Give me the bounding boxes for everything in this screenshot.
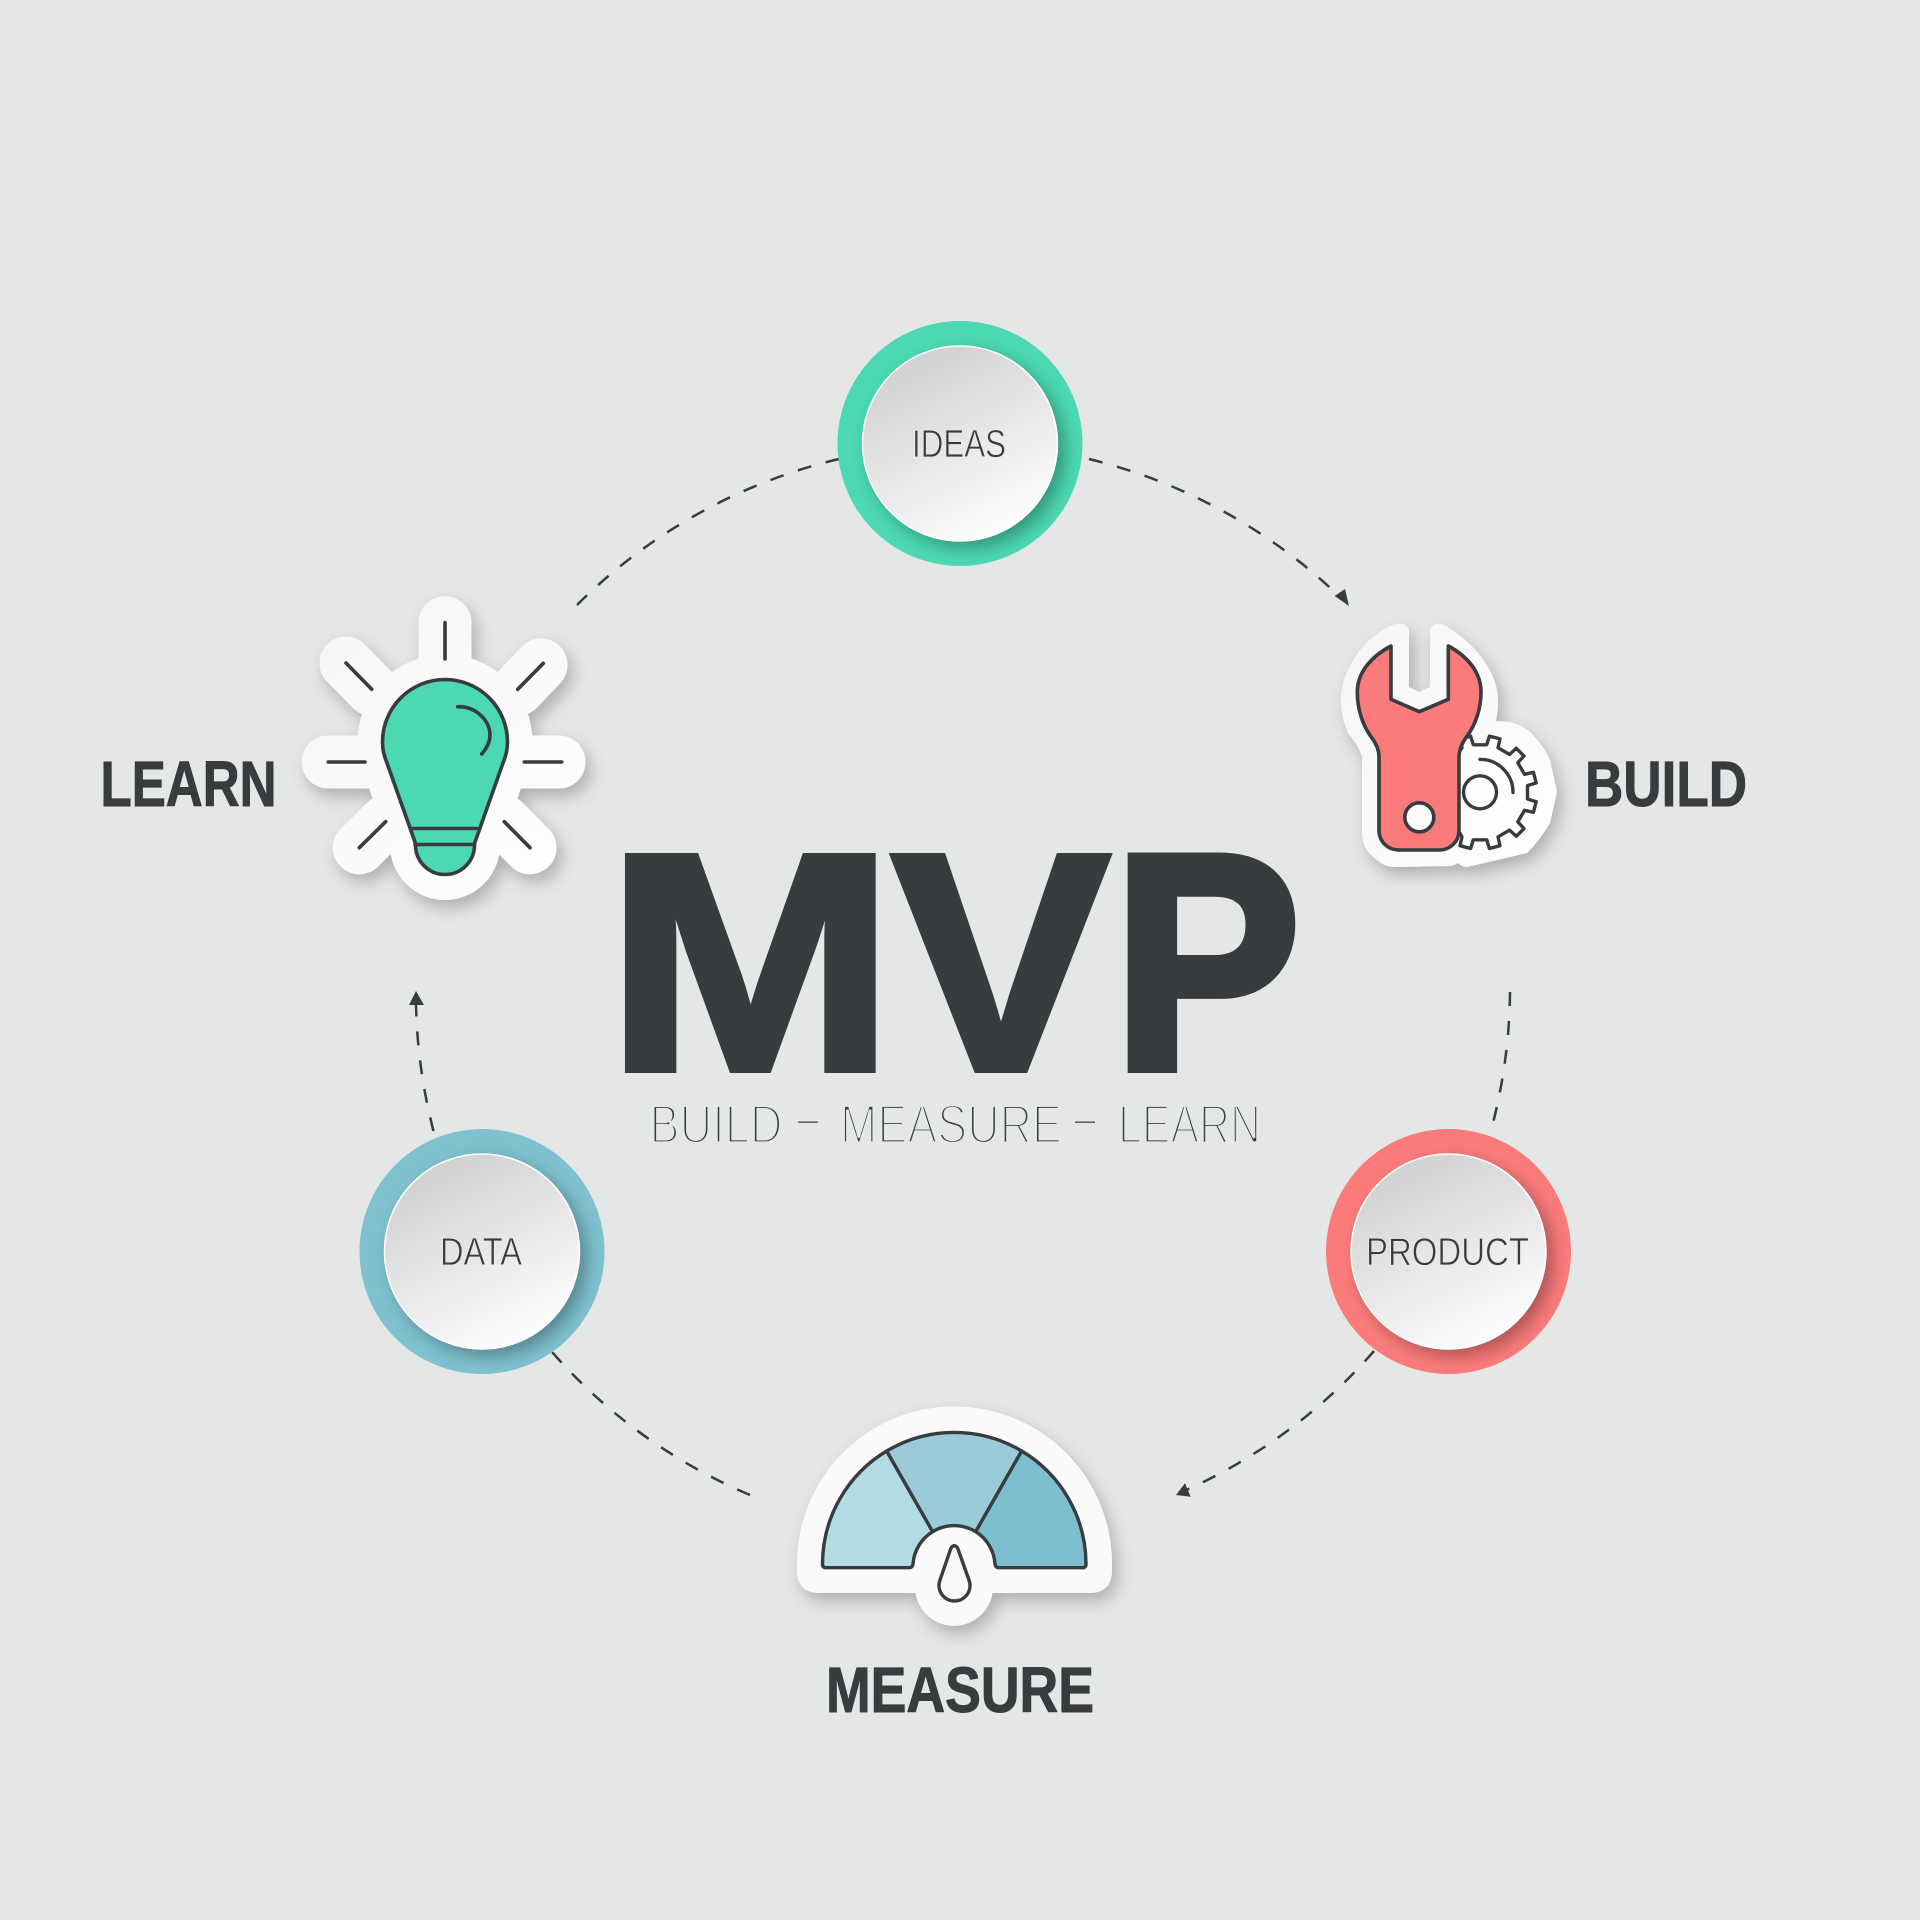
gear <box>1440 736 1536 848</box>
gauge left segment <box>822 1451 933 1568</box>
node: data: DATA <box>440 1231 522 1274</box>
wrench hole <box>1405 803 1434 832</box>
wrench <box>1357 646 1481 850</box>
bulb glass <box>382 680 508 874</box>
arrow: learn to ideas <box>577 459 839 605</box>
infographic canvas <box>104 321 1746 1713</box>
bulb bands and highlight <box>412 707 490 844</box>
title: MVP <box>605 788 1300 1137</box>
gauge middle segment <box>887 1432 1022 1532</box>
title: MVP: P <box>1114 793 1300 1134</box>
sticker: bulb backing <box>328 623 559 875</box>
gauge right segment <box>976 1451 1086 1568</box>
gauge needle <box>939 1546 970 1601</box>
title: MVP: V <box>891 788 1112 1136</box>
subtitle: build measure learn <box>650 1093 1261 1155</box>
icon: wrench and gear <box>1341 624 1557 867</box>
bulb rays <box>328 623 562 848</box>
title: MVP: M <box>605 790 896 1137</box>
node: ideas <box>838 321 1082 566</box>
icon: light bulb <box>328 623 562 875</box>
subtitle: build measure learn: BUILD <box>650 1093 782 1155</box>
arrow: data to learn <box>409 991 434 1131</box>
node: product <box>1326 1129 1571 1374</box>
label: measure: MEASURE <box>826 1654 1094 1726</box>
arrow: ideas to build <box>1089 459 1349 606</box>
arrow: build to product <box>1493 992 1510 1123</box>
node: ideas: IDEAS <box>912 423 1006 466</box>
subtitle: build measure learn: MEASURE <box>840 1093 1062 1155</box>
node: data <box>360 1129 604 1374</box>
arrow: product to measure <box>1176 1351 1374 1497</box>
subtitle: build measure learn: LEARN <box>1118 1093 1261 1155</box>
icon: gauge <box>797 1406 1112 1626</box>
arrow: measure to data <box>552 1352 750 1495</box>
sticker: gauge backing <box>797 1406 1112 1626</box>
label: build: BUILD <box>1585 748 1747 820</box>
node: product: PRODUCT <box>1366 1231 1529 1274</box>
sticker: wrench backing <box>1341 624 1557 867</box>
label: learn: LEARN <box>100 748 276 820</box>
